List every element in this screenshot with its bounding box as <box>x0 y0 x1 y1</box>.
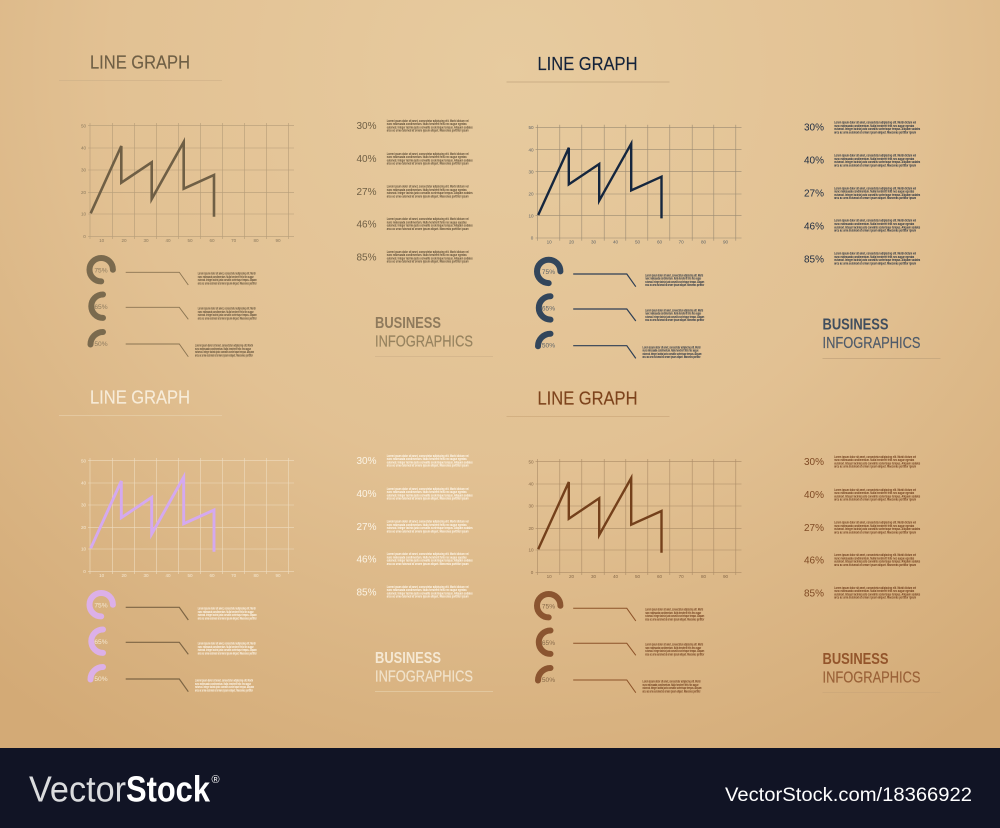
percentage list: 46% <box>356 554 376 566</box>
line chart: 70 <box>679 240 684 245</box>
line chart: 40 <box>165 238 171 243</box>
donut: 50% with callout <box>90 667 254 692</box>
percentage list: Lorem ipsum dolor sit amet, consectetur adipiscing elit. Morbi dictum vel <box>387 585 469 589</box>
line chart: 80 <box>253 238 259 243</box>
percentage list: nunc malesuada condimentum. Nulla hendrerit felis nec augue egestas <box>834 255 914 259</box>
percentage list: Lorem ipsum dolor sit amet, consectetur adipiscing elit. Morbi dictum vel <box>387 217 469 221</box>
donut: 50% with callout: nunc malesuada condimentum. Nulla hendrerit felis nec augue <box>195 682 251 686</box>
donut: 65% with callout: Lorem ipsum dolor sit amet, consectetur adipiscing elit. Morbi <box>645 643 703 647</box>
donut: 50% with callout: euismod. Integer lacinia justo convallis scelerisque tempus. Aliquam <box>195 685 254 689</box>
percentage list: arcu ac urna euismod at ornare ipsum aliquet. Maecenas porttitor ipsum <box>387 595 469 599</box>
line chart: 80 <box>701 574 706 579</box>
donut: 75% with callout: 75% <box>542 269 555 276</box>
donut: 50% with callout: 50% <box>94 341 108 348</box>
percentage list: euismod. Integer lacinia justo convallis scelerisque tempus. Aliquam sodales <box>387 158 473 162</box>
line chart: 60 <box>209 238 215 243</box>
donut: 50% with callout: Lorem ipsum dolor sit amet, consectetur adipiscing elit. Morbi <box>642 680 701 684</box>
percentage list: Lorem ipsum dolor sit amet, consectetur adipiscing elit. Morbi dictum vel <box>834 121 916 125</box>
business infographics label: INFOGRAPHICS <box>822 335 920 352</box>
line chart: 0 <box>531 570 534 575</box>
percentage list: nunc malesuada condimentum. Nulla hendrerit felis nec augue egestas <box>834 556 914 560</box>
donut: 65% with callout: nunc malesuada condimentum. Nulla hendrerit felis nec augue <box>645 646 701 650</box>
donut: 65% with callout: 65% <box>94 639 108 646</box>
heading: line graph: LINE GRAPH <box>90 51 190 72</box>
donut: 75% with callout: euismod. Integer lacinia justo convallis scelerisque tempus. Aliquam <box>198 278 257 282</box>
line chart: 20 <box>569 240 574 245</box>
percentage list: euismod. Integer lacinia justo convallis scelerisque tempus. Aliquam sodales <box>834 193 920 197</box>
percentage list: euismod. Integer lacinia justo convallis scelerisque tempus. Aliquam sodales <box>387 125 473 129</box>
donut: 75% with callout: Lorem ipsum dolor sit amet, consectetur adipiscing elit. Morbi <box>645 273 703 277</box>
business infographics label: INFOGRAPHICS <box>822 670 920 686</box>
percentage list: arcu ac urna euismod at ornare ipsum aliquet. Maecenas porttitor ipsum <box>387 260 469 264</box>
line chart: 30 <box>591 240 596 245</box>
percentage list: 30% <box>356 455 376 467</box>
percentage list: arcu ac urna euismod at ornare ipsum aliquet. Maecenas porttitor ipsum <box>387 194 469 198</box>
percentage list: 27% <box>804 188 824 200</box>
line chart: 30 <box>143 573 149 578</box>
business infographics label: BUSINESS <box>822 317 888 334</box>
percentage list: nunc malesuada condimentum. Nulla hendrerit felis nec augue egestas <box>834 157 914 161</box>
percentage list: Lorem ipsum dolor sit amet, consectetur adipiscing elit. Morbi dictum vel <box>387 552 469 556</box>
line chart: 40 <box>165 573 171 578</box>
percentage list: nunc malesuada condimentum. Nulla hendrerit felis nec augue egestas <box>387 523 467 527</box>
donut: 50% with callout: euismod. Integer lacinia justo convallis scelerisque tempus. Aliquam <box>642 686 702 690</box>
line chart: 40 <box>81 481 86 486</box>
line chart: 90 <box>723 240 728 245</box>
percentage list: arcu ac urna euismod at ornare ipsum aliquet. Maecenas porttitor ipsum <box>834 229 916 233</box>
heading: line graph: LINE GRAPH <box>538 53 638 74</box>
line chart: 50 <box>187 238 193 243</box>
percentage list: euismod. Integer lacinia justo convallis scelerisque tempus. Aliquam sodales <box>834 560 920 564</box>
line chart: 20 <box>81 190 86 195</box>
business infographics label <box>375 650 493 692</box>
percentage list: arcu ac urna euismod at ornare ipsum aliquet. Maecenas porttitor ipsum <box>834 130 916 134</box>
percentage list: nunc malesuada condimentum. Nulla hendrerit felis nec augue egestas <box>834 589 914 593</box>
percentage list: Lorem ipsum dolor sit amet, consectetur adipiscing elit. Morbi dictum vel <box>387 250 469 254</box>
line chart: 20 <box>528 192 534 197</box>
percentage list: euismod. Integer lacinia justo convallis scelerisque tempus. Aliquam sodales <box>834 225 920 229</box>
footer logo: VectorStock: Stock <box>126 769 211 810</box>
donut: 65% with callout: euismod. Integer lacinia justo convallis scelerisque tempus. Aliquam <box>645 649 704 653</box>
line chart: 40 <box>81 146 86 151</box>
percentage list: 40% <box>356 488 376 500</box>
line chart: 0 <box>531 236 534 241</box>
donut: 50% with callout: Lorem ipsum dolor sit amet, consectetur adipiscing elit. Morbi <box>195 344 253 348</box>
donut: 50% with callout: nunc malesuada condimentum. Nulla hendrerit felis nec augue <box>642 683 699 687</box>
donut: 50% with callout: arcu ac urna euismod at ornare ipsum aliquet. Maecenas porttitor <box>195 354 253 358</box>
percentage list: Lorem ipsum dolor sit amet, consectetur adipiscing elit. Morbi dictum vel <box>834 252 916 256</box>
donut: 75% with callout <box>89 593 257 620</box>
percentage list: Lorem ipsum dolor sit amet, consectetur adipiscing elit. Morbi dictum vel <box>387 152 469 156</box>
donut: 50% with callout: nunc malesuada condimentum. Nulla hendrerit felis nec augue <box>195 347 251 351</box>
line chart: 40 <box>528 482 534 487</box>
percentage list: nunc malesuada condimentum. Nulla hendrerit felis nec augue egestas <box>834 222 914 226</box>
donut: 50% with callout: euismod. Integer lacinia justo convallis scelerisque tempus. Aliquam <box>642 352 702 356</box>
donut: 65% with callout: arcu ac urna euismod at ornare ipsum aliquet. Maecenas porttitor <box>645 318 705 322</box>
percentage list: arcu ac urna euismod at ornare ipsum aliquet. Maecenas porttitor ipsum <box>834 563 916 567</box>
donut: 50% with callout <box>90 332 254 358</box>
line chart: 40 <box>528 147 534 152</box>
percentage list: Lorem ipsum dolor sit amet, consectetur adipiscing elit. Morbi dictum vel <box>834 553 916 557</box>
percentage list: arcu ac urna euismod at ornare ipsum aliquet. Maecenas porttitor ipsum <box>834 596 916 600</box>
line chart: 50 <box>528 125 534 130</box>
line chart: 30 <box>143 238 149 243</box>
line chart: 10 <box>99 573 105 578</box>
percentage list: arcu ac urna euismod at ornare ipsum aliquet. Maecenas porttitor ipsum <box>387 129 469 133</box>
donut: 75% with callout: Lorem ipsum dolor sit amet, consectetur adipiscing elit. Morbi <box>198 272 256 276</box>
percentage list: euismod. Integer lacinia justo convallis scelerisque tempus. Aliquam sodales <box>834 461 920 465</box>
line chart: 40 <box>613 240 618 245</box>
percentage list: nunc malesuada condimentum. Nulla hendrerit felis nec augue egestas <box>387 188 467 192</box>
donut: 50% with callout: 50% <box>94 676 108 683</box>
percentage list: 46% <box>804 220 824 232</box>
footer logo: VectorStock <box>29 769 220 810</box>
percentage list: nunc malesuada condimentum. Nulla hendrerit felis nec augue egestas <box>834 124 914 128</box>
donut: 75% with callout: nunc malesuada condimentum. Nulla hendrerit felis nec augue <box>198 610 254 614</box>
line chart: 10 <box>99 238 105 243</box>
line chart: 20 <box>569 574 574 579</box>
heading: line graph: LINE GRAPH <box>538 387 638 408</box>
percentage list: Lorem ipsum dolor sit amet, consectetur adipiscing elit. Morbi dictum vel <box>387 119 469 123</box>
percentage list <box>356 454 473 599</box>
percentage list <box>804 120 920 265</box>
donut: 65% with callout: 65% <box>542 306 555 313</box>
percentage list: nunc malesuada condimentum. Nulla hendrerit felis nec augue egestas <box>834 491 914 495</box>
percentage list: arcu ac urna euismod at ornare ipsum aliquet. Maecenas porttitor ipsum <box>387 464 469 468</box>
line chart: 50 <box>528 459 534 464</box>
donut: 50% with callout: Lorem ipsum dolor sit amet, consectetur adipiscing elit. Morbi <box>642 345 701 349</box>
percentage list: nunc malesuada condimentum. Nulla hendrerit felis nec augue egestas <box>834 458 914 462</box>
footer logo: VectorStock: Vector <box>29 769 126 810</box>
line chart: 90 <box>275 238 281 243</box>
percentage list: Lorem ipsum dolor sit amet, consectetur adipiscing elit. Morbi dictum vel <box>387 487 469 491</box>
percentage list: Lorem ipsum dolor sit amet, consectetur adipiscing elit. Morbi dictum vel <box>834 521 916 525</box>
footer bar <box>0 748 1000 828</box>
percentage list: Lorem ipsum dolor sit amet, consectetur adipiscing elit. Morbi dictum vel <box>834 154 916 158</box>
donut: 75% with callout: arcu ac urna euismod at ornare ipsum aliquet. Maecenas porttitor <box>645 618 705 622</box>
donut: 65% with callout <box>91 630 257 656</box>
line chart: 20 <box>121 238 127 243</box>
percentage list: arcu ac urna euismod at ornare ipsum aliquet. Maecenas porttitor ipsum <box>387 530 469 534</box>
percentage list: nunc malesuada condimentum. Nulla hendrerit felis nec augue egestas <box>387 555 467 559</box>
percentage list: arcu ac urna euismod at ornare ipsum aliquet. Maecenas porttitor ipsum <box>834 163 916 167</box>
donut: 50% with callout: Lorem ipsum dolor sit amet, consectetur adipiscing elit. Morbi <box>195 679 253 683</box>
percentage list: 46% <box>804 555 824 567</box>
percentage list <box>356 119 473 264</box>
line chart: 20 <box>81 525 86 530</box>
line chart: 90 <box>275 573 281 578</box>
donut: 65% with callout: euismod. Integer lacinia justo convallis scelerisque tempus. Aliquam <box>645 315 704 319</box>
donut: 75% with callout: 75% <box>94 267 108 274</box>
percentage list: euismod. Integer lacinia justo convallis scelerisque tempus. Aliquam sodales <box>387 460 473 464</box>
footer image id: VectorStock.com/18366922 <box>725 784 972 806</box>
percentage list: arcu ac urna euismod at ornare ipsum aliquet. Maecenas porttitor ipsum <box>387 227 469 231</box>
donut: 50% with callout: arcu ac urna euismod at ornare ipsum aliquet. Maecenas porttitor <box>642 355 701 359</box>
percentage list: euismod. Integer lacinia justo convallis scelerisque tempus. Aliquam sodales <box>834 160 920 164</box>
donut: 75% with callout: nunc malesuada condimentum. Nulla hendrerit felis nec augue <box>198 275 254 279</box>
percentage list: euismod. Integer lacinia justo convallis scelerisque tempus. Aliquam sodales <box>387 493 473 497</box>
percentage list: euismod. Integer lacinia justo convallis scelerisque tempus. Aliquam sodales <box>387 526 473 530</box>
percentage list: Lorem ipsum dolor sit amet, consectetur adipiscing elit. Morbi dictum vel <box>387 185 469 189</box>
donut: 50% with callout: 50% <box>542 343 555 350</box>
donut: 50% with callout: 50% <box>542 677 555 684</box>
line chart: 10 <box>547 240 552 245</box>
percentage list: arcu ac urna euismod at ornare ipsum aliquet. Maecenas porttitor ipsum <box>834 498 916 502</box>
line chart: 30 <box>81 168 86 173</box>
line chart: 60 <box>657 240 662 245</box>
line chart: 0 <box>83 234 86 239</box>
percentage list: Lorem ipsum dolor sit amet, consectetur adipiscing elit. Morbi dictum vel <box>834 219 916 223</box>
donut: 75% with callout: 75% <box>94 602 108 609</box>
donut: 65% with callout <box>539 630 705 656</box>
donut: 65% with callout <box>539 296 705 322</box>
percentage list: nunc malesuada condimentum. Nulla hendrerit felis nec augue egestas <box>387 253 467 257</box>
donut: 50% with callout: arcu ac urna euismod at ornare ipsum aliquet. Maecenas porttitor <box>195 688 253 692</box>
donut: 65% with callout <box>91 294 257 320</box>
percentage list: euismod. Integer lacinia justo convallis scelerisque tempus. Aliquam sodales <box>834 592 920 596</box>
line chart: 70 <box>231 573 237 578</box>
line chart: 10 <box>528 548 534 553</box>
donut: 50% with callout: nunc malesuada condimentum. Nulla hendrerit felis nec augue <box>642 349 699 353</box>
donut: 65% with callout: euismod. Integer lacinia justo convallis scelerisque tempus. Aliquam <box>198 648 257 652</box>
percentage list: 27% <box>804 522 824 534</box>
percentage list: arcu ac urna euismod at ornare ipsum aliquet. Maecenas porttitor ipsum <box>834 261 916 265</box>
percentage list: euismod. Integer lacinia justo convallis scelerisque tempus. Aliquam sodales <box>387 224 473 228</box>
line chart: 0 <box>83 569 86 574</box>
percentage list: 27% <box>356 186 376 198</box>
percentage list: 40% <box>804 489 824 501</box>
donut: 75% with callout: euismod. Integer lacinia justo convallis scelerisque tempus. Aliquam <box>645 614 704 618</box>
percentage list: euismod. Integer lacinia justo convallis scelerisque tempus. Aliquam sodales <box>387 256 473 260</box>
line chart: 30 <box>591 574 596 579</box>
percentage list: euismod. Integer lacinia justo convallis scelerisque tempus. Aliquam sodales <box>834 527 920 531</box>
percentage list: nunc malesuada condimentum. Nulla hendrerit felis nec augue egestas <box>387 220 467 224</box>
donut: 65% with callout: euismod. Integer lacinia justo convallis scelerisque tempus. Aliquam <box>198 313 257 317</box>
line chart: 80 <box>701 240 706 245</box>
line chart <box>528 459 742 579</box>
percentage list: Lorem ipsum dolor sit amet, consectetur adipiscing elit. Morbi dictum vel <box>387 454 469 458</box>
percentage list: Lorem ipsum dolor sit amet, consectetur adipiscing elit. Morbi dictum vel <box>387 520 469 524</box>
line chart: 10 <box>547 574 552 579</box>
percentage list: arcu ac urna euismod at ornare ipsum aliquet. Maecenas porttitor ipsum <box>387 562 469 566</box>
donut: 75% with callout: nunc malesuada condimentum. Nulla hendrerit felis nec augue <box>645 611 701 615</box>
line chart: 10 <box>81 547 86 552</box>
heading: line graph: LINE GRAPH <box>90 386 190 407</box>
percentage list: Lorem ipsum dolor sit amet, consectetur adipiscing elit. Morbi dictum vel <box>834 186 916 190</box>
donut: 75% with callout: arcu ac urna euismod at ornare ipsum aliquet. Maecenas porttitor <box>198 616 257 620</box>
percentage list: 40% <box>804 155 824 167</box>
percentage list: nunc malesuada condimentum. Nulla hendrerit felis nec augue egestas <box>387 122 467 126</box>
donut: 65% with callout: Lorem ipsum dolor sit amet, consectetur adipiscing elit. Morbi <box>198 307 256 311</box>
percentage list: arcu ac urna euismod at ornare ipsum aliquet. Maecenas porttitor ipsum <box>834 196 916 200</box>
business infographics label: INFOGRAPHICS <box>375 334 473 350</box>
footer logo: VectorStock: ® <box>212 774 220 786</box>
percentage list: 85% <box>804 588 824 600</box>
line chart: 30 <box>528 504 534 509</box>
donut: 75% with callout: Lorem ipsum dolor sit amet, consectetur adipiscing elit. Morbi <box>645 608 703 612</box>
business infographics label: BUSINESS <box>822 651 888 668</box>
panel: bottom-right infographic (rust brown) <box>506 387 940 694</box>
line chart: 50 <box>81 458 86 463</box>
percentage list: arcu ac urna euismod at ornare ipsum aliquet. Maecenas porttitor ipsum <box>387 497 469 501</box>
line chart: 50 <box>635 240 640 245</box>
line chart: 40 <box>613 574 618 579</box>
donut: 75% with callout: euismod. Integer lacinia justo convallis scelerisque tempus. Aliquam <box>645 280 704 284</box>
panel: top-left infographic (brown-grey) <box>59 51 493 358</box>
donut: 50% with callout <box>538 334 702 359</box>
line chart <box>528 125 742 244</box>
donut: 65% with callout: nunc malesuada condimentum. Nulla hendrerit felis nec augue <box>645 312 701 316</box>
percentage list: nunc malesuada condimentum. Nulla hendrerit felis nec augue egestas <box>387 490 467 494</box>
percentage list: 30% <box>356 120 376 132</box>
line chart: 10 <box>81 212 86 217</box>
line chart: 10 <box>528 213 534 218</box>
business infographics label: BUSINESS <box>375 650 441 667</box>
percentage list: 30% <box>804 122 824 134</box>
percentage list: Lorem ipsum dolor sit amet, consectetur adipiscing elit. Morbi dictum vel <box>834 455 916 459</box>
percentage list: nunc malesuada condimentum. Nulla hendrerit felis nec augue egestas <box>387 588 467 592</box>
donut: 75% with callout <box>537 594 705 622</box>
donut: 65% with callout: arcu ac urna euismod at ornare ipsum aliquet. Maecenas porttitor <box>198 652 257 656</box>
percentage list: 27% <box>356 521 376 533</box>
line chart: 50 <box>81 123 86 128</box>
donut: 65% with callout: Lorem ipsum dolor sit amet, consectetur adipiscing elit. Morbi <box>198 642 256 646</box>
percentage list: nunc malesuada condimentum. Nulla hendrerit felis nec augue egestas <box>834 190 914 194</box>
donut: 75% with callout: nunc malesuada condimentum. Nulla hendrerit felis nec augue <box>645 277 701 281</box>
line chart: 60 <box>209 573 215 578</box>
donut: 65% with callout: nunc malesuada condimentum. Nulla hendrerit felis nec augue <box>198 310 254 314</box>
donut: 75% with callout <box>89 258 257 286</box>
donut: 75% with callout: Lorem ipsum dolor sit amet, consectetur adipiscing elit. Morbi <box>198 607 256 611</box>
business infographics label <box>822 651 940 693</box>
percentage list: 85% <box>356 587 376 599</box>
donut: 65% with callout: arcu ac urna euismod at ornare ipsum aliquet. Maecenas porttitor <box>645 652 705 656</box>
percentage list: euismod. Integer lacinia justo convallis scelerisque tempus. Aliquam sodales <box>387 591 473 595</box>
donut: 65% with callout: Lorem ipsum dolor sit amet, consectetur adipiscing elit. Morbi <box>645 308 703 312</box>
line chart: 90 <box>723 574 728 579</box>
donut: 75% with callout: 75% <box>542 603 555 610</box>
donut: 50% with callout: arcu ac urna euismod at ornare ipsum aliquet. Maecenas porttitor <box>642 690 701 694</box>
donut: 65% with callout: 65% <box>94 304 108 311</box>
line chart: 50 <box>635 574 640 579</box>
panel: top-right infographic (navy) <box>506 53 940 359</box>
line chart: 30 <box>528 169 534 174</box>
percentage list: Lorem ipsum dolor sit amet, consectetur adipiscing elit. Morbi dictum vel <box>834 586 916 590</box>
percentage list: 46% <box>356 219 376 231</box>
percentage list: euismod. Integer lacinia justo convallis scelerisque tempus. Aliquam sodales <box>834 494 920 498</box>
line chart <box>81 458 294 578</box>
business infographics label <box>822 317 940 358</box>
line chart: 60 <box>657 574 662 579</box>
donut: 75% with callout <box>537 260 705 287</box>
line chart: 30 <box>81 503 86 508</box>
percentage list: euismod. Integer lacinia justo convallis scelerisque tempus. Aliquam sodales <box>387 191 473 195</box>
line chart: 20 <box>528 526 534 531</box>
percentage list: euismod. Integer lacinia justo convallis scelerisque tempus. Aliquam sodales <box>834 127 920 131</box>
line chart: 70 <box>679 574 684 579</box>
percentage list: arcu ac urna euismod at ornare ipsum aliquet. Maecenas porttitor ipsum <box>834 530 916 534</box>
percentage list: 85% <box>804 253 824 265</box>
percentage list: euismod. Integer lacinia justo convallis scelerisque tempus. Aliquam sodales <box>834 258 920 262</box>
percentage list: nunc malesuada condimentum. Nulla hendrerit felis nec augue egestas <box>387 155 467 159</box>
donut: 75% with callout: euismod. Integer lacinia justo convallis scelerisque tempus. Aliquam <box>198 613 257 617</box>
panel: bottom-left infographic (white and lilac) <box>59 386 493 692</box>
donut: 65% with callout: 65% <box>542 640 555 647</box>
donut: 50% with callout <box>538 668 702 694</box>
percentage list: 85% <box>356 252 376 264</box>
percentage list: nunc malesuada condimentum. Nulla hendrerit felis nec augue egestas <box>387 457 467 461</box>
line chart: 70 <box>231 238 237 243</box>
line chart: 20 <box>121 573 127 578</box>
donut: 65% with callout: arcu ac urna euismod at ornare ipsum aliquet. Maecenas porttitor <box>198 316 257 320</box>
percentage list <box>804 455 920 600</box>
percentage list: 30% <box>804 456 824 468</box>
percentage list: Lorem ipsum dolor sit amet, consectetur adipiscing elit. Morbi dictum vel <box>834 488 916 492</box>
line chart: 50 <box>187 573 193 578</box>
donut: 75% with callout: arcu ac urna euismod at ornare ipsum aliquet. Maecenas porttitor <box>645 283 705 287</box>
business infographics label: BUSINESS <box>375 315 441 332</box>
line chart: 80 <box>253 573 259 578</box>
business infographics label <box>375 315 493 357</box>
percentage list: nunc malesuada condimentum. Nulla hendrerit felis nec augue egestas <box>834 524 914 528</box>
percentage list: euismod. Integer lacinia justo convallis scelerisque tempus. Aliquam sodales <box>387 559 473 563</box>
donut: 75% with callout: arcu ac urna euismod at ornare ipsum aliquet. Maecenas porttitor <box>198 282 257 286</box>
percentage list: arcu ac urna euismod at ornare ipsum aliquet. Maecenas porttitor ipsum <box>834 465 916 469</box>
business infographics label: INFOGRAPHICS <box>375 668 473 686</box>
donut: 50% with callout: euismod. Integer lacinia justo convallis scelerisque tempus. Aliquam <box>195 350 254 354</box>
percentage list: arcu ac urna euismod at ornare ipsum aliquet. Maecenas porttitor ipsum <box>387 162 469 166</box>
percentage list: 40% <box>356 153 376 165</box>
line chart <box>81 123 294 243</box>
donut: 65% with callout: nunc malesuada condimentum. Nulla hendrerit felis nec augue <box>198 645 254 649</box>
